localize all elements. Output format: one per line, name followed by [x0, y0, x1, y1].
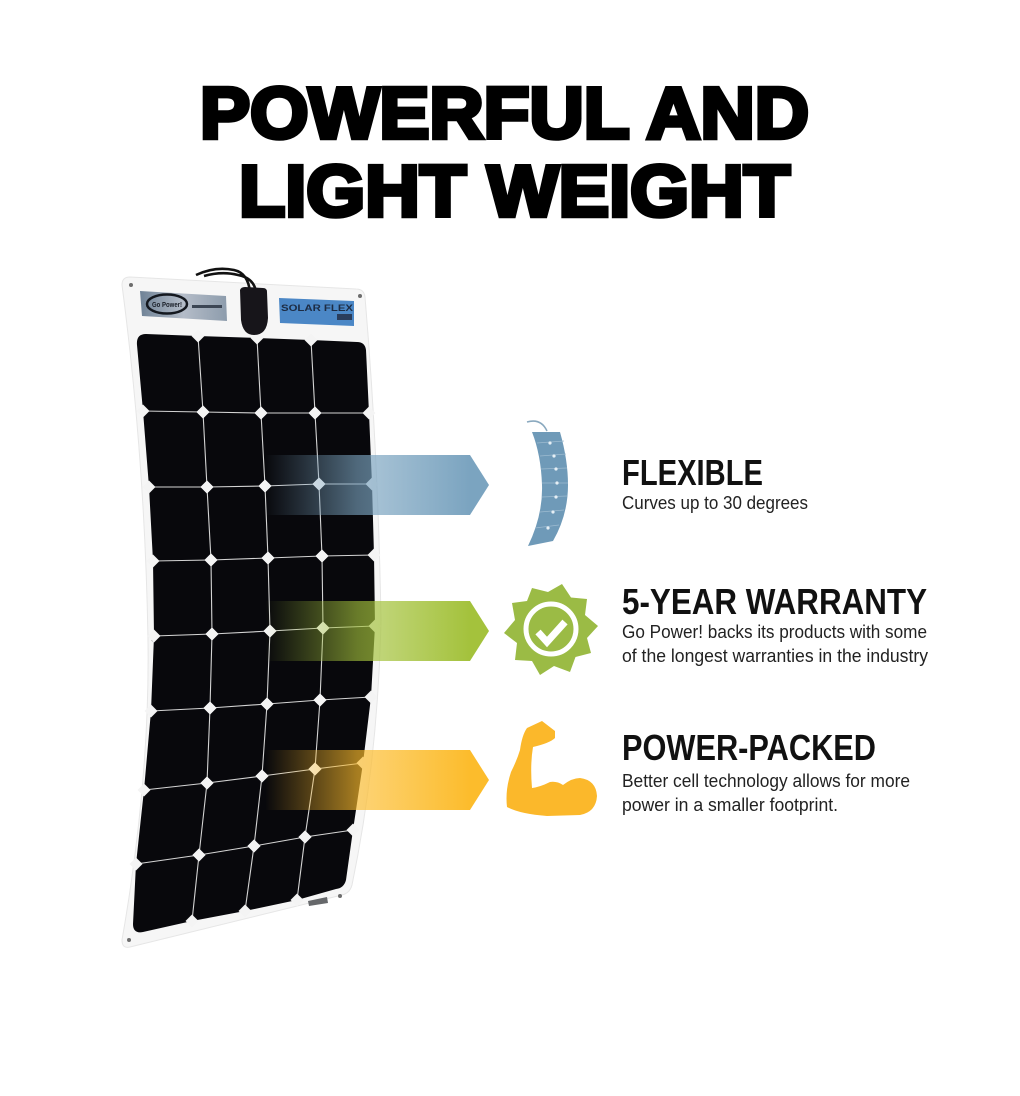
- icon: flexed arm: [506, 721, 597, 816]
- text block: power-packed: power in a smaller footprint.: [622, 794, 838, 815]
- panel product label: SOLAR FLEX: [281, 303, 353, 313]
- text block: flexible: [622, 452, 808, 513]
- junction box: [240, 287, 268, 335]
- icon: warranty badge: [504, 584, 598, 675]
- text block: warranty: Go Power! backs its products with some: [622, 621, 927, 642]
- text block: warranty: of the longest warranties in the industry: [622, 645, 929, 666]
- arrow: yellow: [265, 750, 489, 810]
- panel logo label: [140, 291, 227, 321]
- panel backing sheet: [122, 277, 381, 947]
- solar panel: [122, 269, 381, 947]
- panel product label: [279, 298, 354, 326]
- title: [200, 74, 809, 232]
- solar cells: [133, 334, 375, 932]
- text block: power-packed: [622, 727, 910, 815]
- rating plate: [308, 897, 328, 906]
- icon: flexible panel: [527, 421, 568, 546]
- arrow: blue: [265, 455, 489, 515]
- text block: flexible: FLEXIBLE: [622, 452, 763, 493]
- arrow: green: [265, 601, 489, 661]
- text block: power-packed: POWER-PACKED: [622, 727, 876, 768]
- title: LIGHT WEIGHT: [239, 152, 790, 232]
- title: POWERFUL AND: [200, 74, 809, 154]
- text block: warranty: 5-YEAR WARRANTY: [622, 581, 927, 622]
- screw holes: [127, 283, 362, 942]
- panel logo label: Go Power!: [152, 302, 182, 309]
- panel cables: [196, 269, 256, 292]
- text block: flexible: Curves up to 30 degrees: [622, 492, 808, 513]
- text block: power-packed: Better cell technology allows for more: [622, 770, 910, 791]
- cell grid lines: [136, 336, 375, 921]
- text block: warranty: [622, 581, 929, 666]
